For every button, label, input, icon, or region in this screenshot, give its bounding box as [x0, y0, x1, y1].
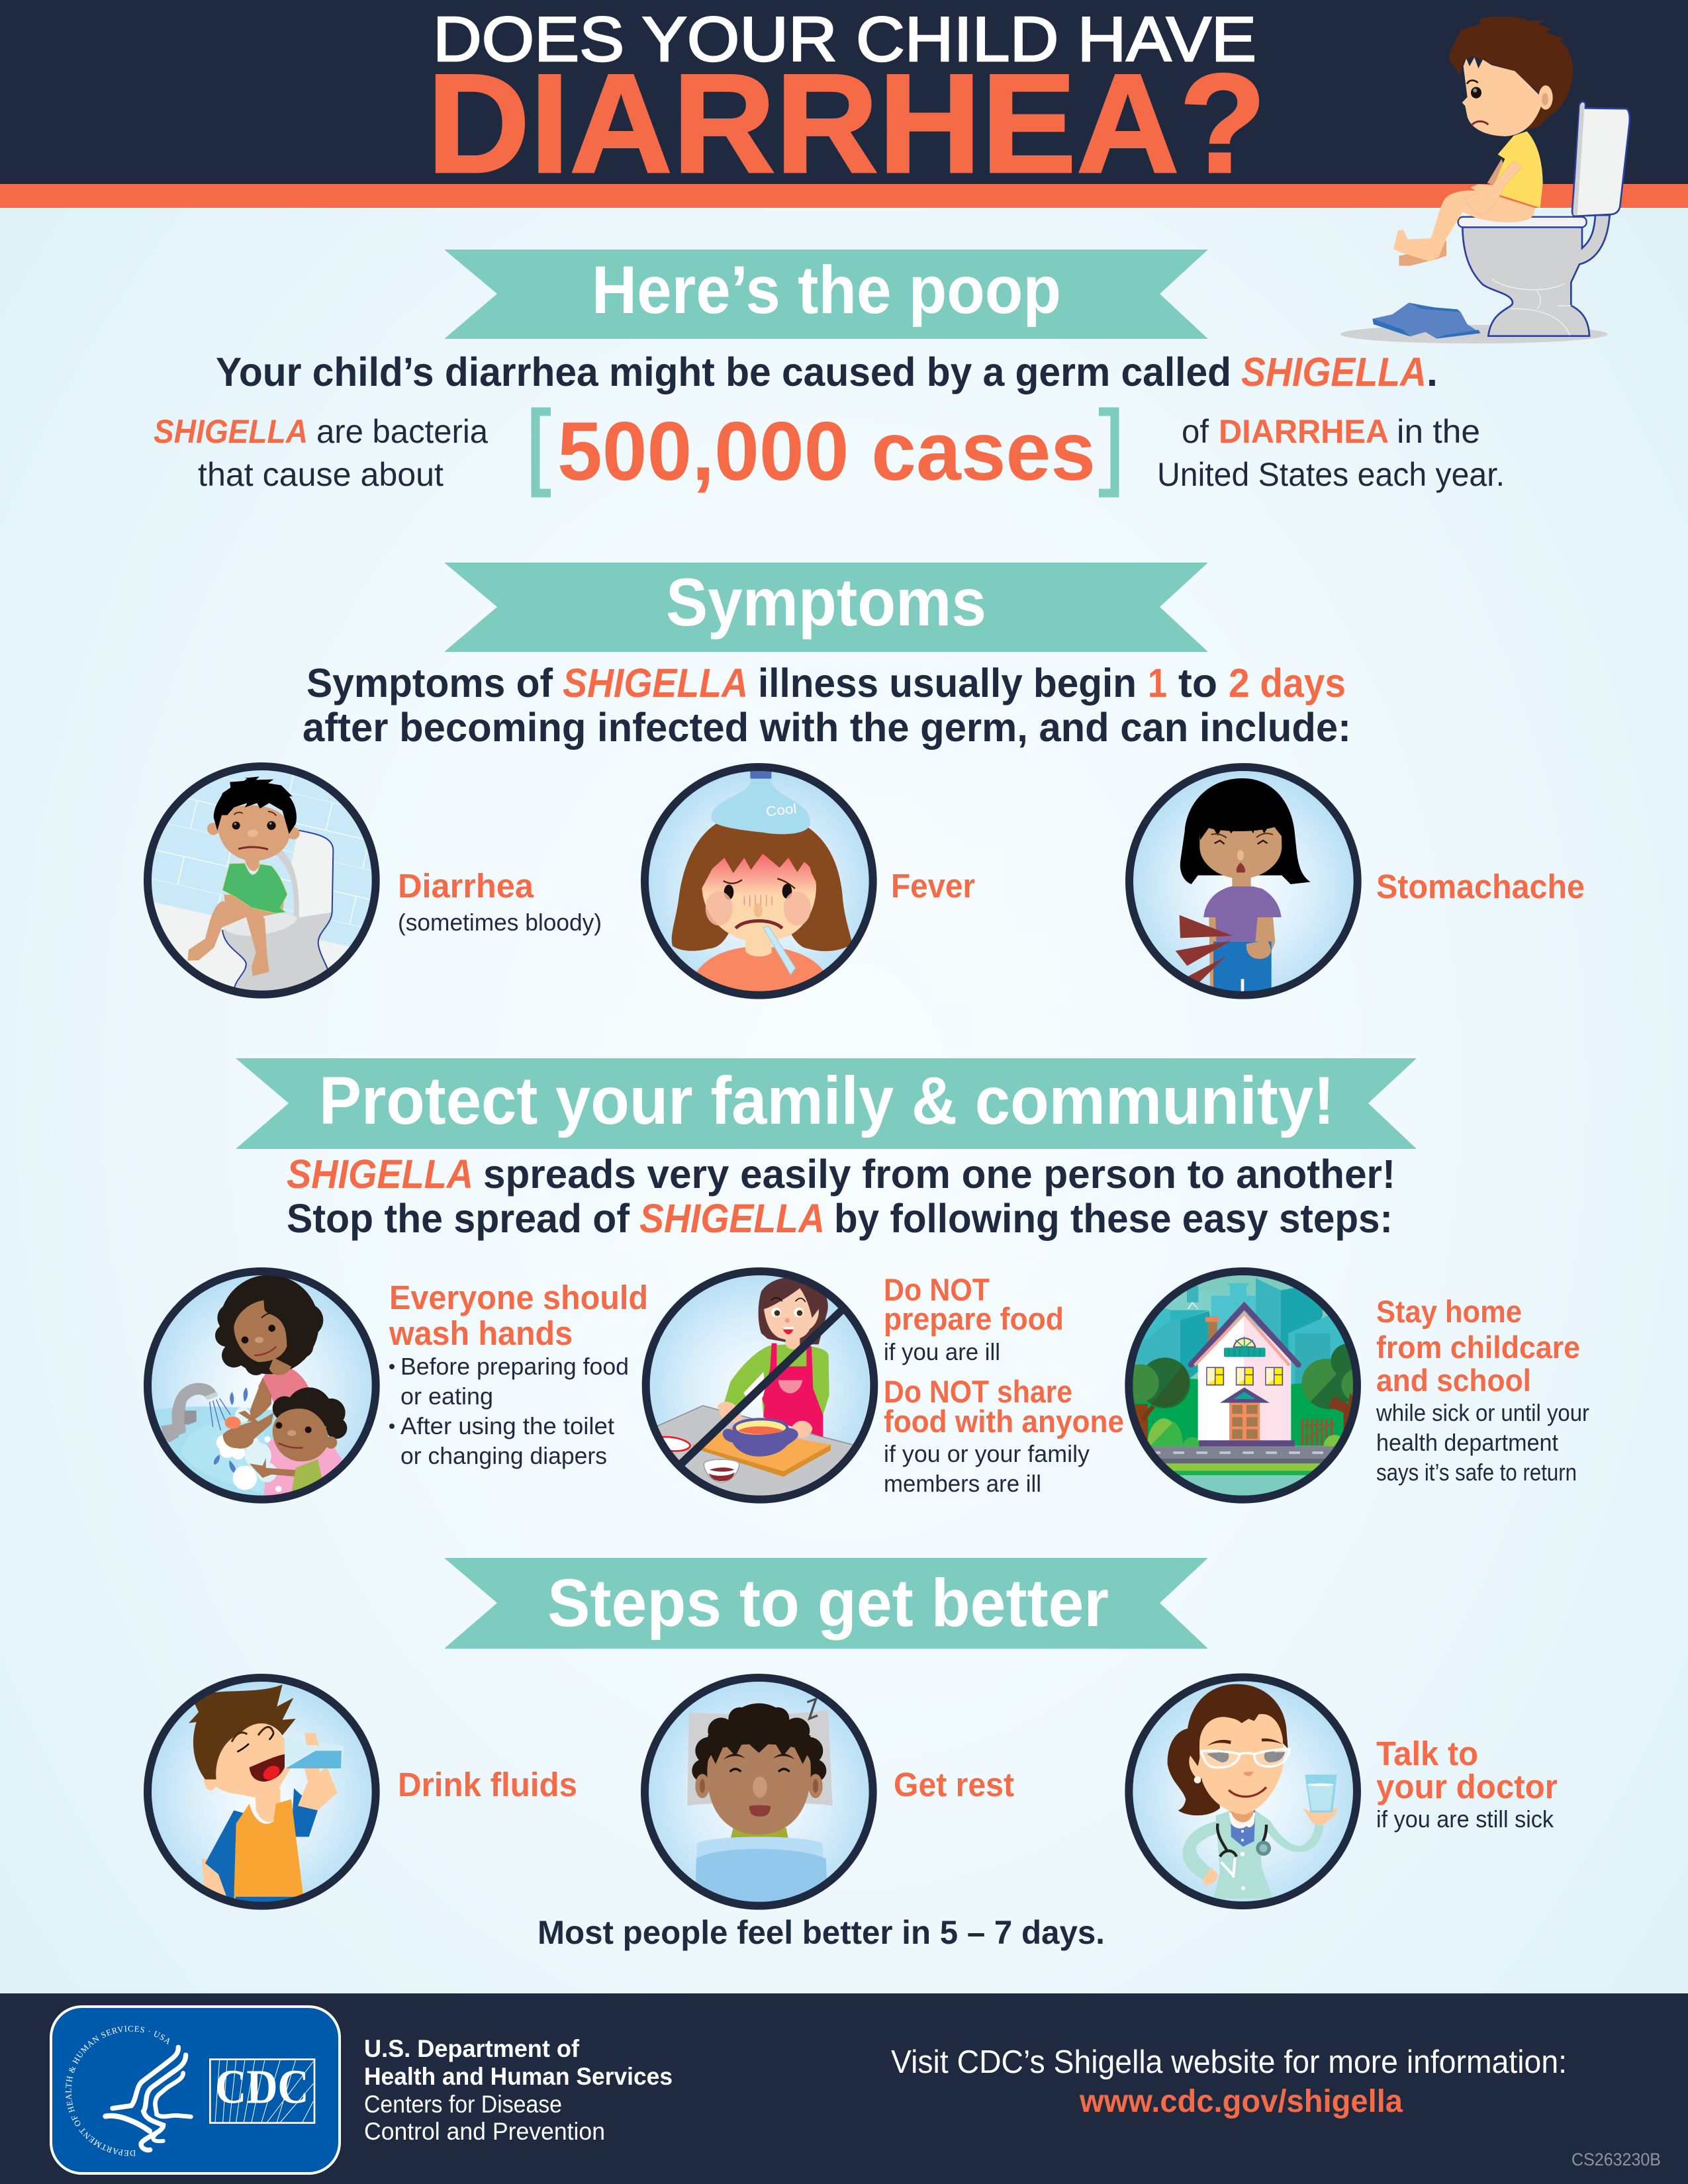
text: stay home: from childcare [1376, 1330, 1580, 1365]
protect intro text: spreads very easily from one person to another! [483, 1152, 1395, 1197]
ribbon: symptoms [444, 563, 1208, 652]
intro sentence: . [1427, 349, 1438, 394]
protect intro text: SHIGELLA [639, 1196, 825, 1241]
text: everyone should wash hands: After using the toilet [400, 1412, 614, 1439]
text: stay home [1376, 1294, 1589, 1486]
text: do not prepare food: members are ill [884, 1470, 1041, 1497]
left text: shigella are bacteria: are bacteria [316, 413, 488, 450]
symptoms intro text: illness usually begin [758, 660, 1137, 705]
CDC and HHS logo: DEPARTMENT OF HEALTH & HUMAN SERVICES · USA [66, 2026, 169, 2156]
text: talk to your doctor [1376, 1735, 1558, 1833]
protect intro text: by following these easy steps: [834, 1196, 1393, 1241]
title: DIARRHEA? [427, 45, 1266, 203]
protect intro text: Stop the spread of [287, 1196, 630, 1241]
left text: shigella are bacteria [154, 413, 488, 493]
intro sentence: SHIGELLA [1241, 349, 1427, 394]
protect intro text: SHIGELLA [287, 1152, 473, 1197]
footer text: HHS and CDC names [364, 2035, 673, 2145]
callout: 500,000 cases: 500,000 cases [557, 406, 1096, 498]
icon: girl with fever: Cool [765, 801, 798, 819]
CDC and HHS logo: CDC [215, 2060, 309, 2114]
icon: doctor [1121, 1669, 1366, 1914]
symptoms intro text: SHIGELLA [563, 660, 748, 705]
footer text: website [891, 2044, 1567, 2119]
text: everyone should wash hands: or eating [400, 1383, 493, 1410]
label: get rest: Get rest [894, 1766, 1014, 1803]
right text: of diarrhea: of [1182, 413, 1209, 450]
icon: girl with stomachache [1121, 758, 1366, 1003]
ribbon: here's the poop [444, 250, 1208, 339]
right text: of diarrhea: DIARRHEA [1219, 413, 1389, 450]
publication code: CS263230B [1571, 2150, 1661, 2169]
heading: protect your family: Protect your family & community! [319, 1063, 1335, 1138]
text: stay home: while sick or until your [1376, 1399, 1589, 1426]
footer text: HHS and CDC names: Centers for Disease [364, 2091, 562, 2118]
right text: of diarrhea [1157, 413, 1505, 493]
text: do not prepare food: if you are ill [884, 1338, 1000, 1365]
icon: woman preparing food with no symbol [635, 1263, 880, 1508]
label: diarrhea: Diarrhea [398, 867, 534, 905]
footer text: HHS and CDC names: Health and Human Services [364, 2063, 673, 2090]
text: everyone should wash hands: Before preparing food [400, 1353, 629, 1380]
text: stay home: and school [1376, 1363, 1531, 1398]
right text: of diarrhea: United States each year. [1157, 456, 1505, 493]
ribbon: steps to get better [444, 1558, 1208, 1649]
protect intro text [287, 1152, 1395, 1241]
footer band [0, 1993, 1688, 2184]
text: do not prepare food: food with anyone [884, 1404, 1124, 1439]
closing sentence: Most people feel better in 5 – 7 days. [538, 1914, 1105, 1951]
icon: house [1125, 1267, 1361, 1504]
text: everyone should wash hands: wash hands [389, 1314, 573, 1352]
symptoms intro text: to [1178, 660, 1217, 705]
label: diarrhea: (sometimes bloody) [398, 909, 602, 936]
text: everyone should wash hands: Everyone should [389, 1279, 648, 1316]
label: fever: Fever [891, 867, 975, 905]
text: stay home: health department [1376, 1429, 1558, 1456]
symptoms intro text: after becoming infected with the germ, and can include: [303, 705, 1351, 750]
right text: of diarrhea: in the [1397, 413, 1480, 450]
text: talk to your doctor: Talk to [1376, 1735, 1478, 1772]
symptoms intro text [303, 660, 1351, 750]
footer text: website: Visit CDC’s Shigella website for more information: [891, 2044, 1567, 2080]
icon: mother and child washing hands [139, 1263, 384, 1508]
label: diarrhea [398, 867, 602, 936]
left text: shigella are bacteria: that cause about [198, 456, 444, 493]
symptoms intro text: Symptoms of [306, 660, 553, 705]
footer text: website: www.cdc.gov/shigella [1079, 2084, 1403, 2119]
text: stay home: Stay home [1376, 1294, 1522, 1329]
icon: boy resting [636, 1669, 881, 1914]
heading: here's the poop: Here’s the poop [592, 252, 1061, 328]
label: drink fluids: Drink fluids [398, 1766, 577, 1803]
text: everyone should wash hands [389, 1279, 648, 1469]
text: do not prepare food: if you or your family [884, 1440, 1090, 1467]
left text: shigella are bacteria: SHIGELLA [154, 413, 308, 450]
heading: symptoms: Symptoms [666, 565, 986, 640]
icon: boy drinking [139, 1669, 384, 1914]
header banner [0, 0, 1688, 208]
symptoms intro text: 1 [1148, 660, 1167, 705]
text: do not prepare food [884, 1272, 1124, 1497]
symptoms intro text: 2 days [1229, 660, 1346, 705]
text: talk to your doctor: if you are still sick [1376, 1805, 1554, 1833]
illustration: child on toilet [1340, 17, 1630, 343]
heading: steps to get better: Steps to get better [547, 1565, 1109, 1641]
text: do not prepare food: Do NOT [884, 1272, 990, 1307]
CDC and HHS logo [50, 2005, 341, 2175]
text: everyone should wash hands: or changing diapers [400, 1442, 607, 1469]
icon: girl with fever [636, 758, 881, 1003]
intro sentence: Your child’s diarrhea might be caused by a germ called [216, 349, 1231, 394]
footer text: HHS and CDC names: Control and Prevention [364, 2118, 605, 2145]
text: do not prepare food: Do NOT share [884, 1374, 1072, 1409]
label: stomachache: Stomachache [1376, 868, 1585, 905]
ribbon: protect your family [236, 1058, 1417, 1149]
title: DOES YOUR CHILD HAVE [433, 4, 1256, 75]
text: do not prepare food: prepare food [884, 1301, 1064, 1336]
footer text: HHS and CDC names: U.S. Department of [364, 2035, 580, 2062]
icon: boy on toilet (diarrhea) [139, 758, 384, 1003]
text: stay home: says it’s safe to return [1376, 1459, 1577, 1486]
text: talk to your doctor: your doctor [1376, 1768, 1558, 1805]
